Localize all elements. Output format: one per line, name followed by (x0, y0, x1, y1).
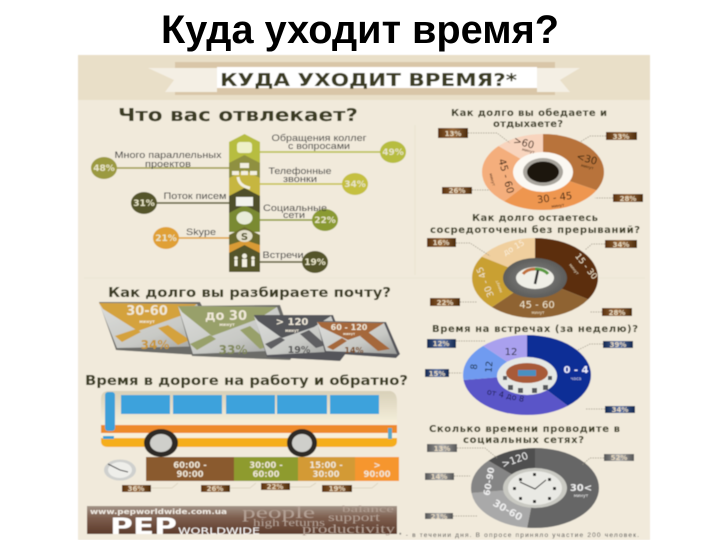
heading: commute: Время в дороге на работу и обратно? (85, 374, 408, 389)
donut chart: 45 - 60 (496, 158, 515, 195)
donut chart: >120 (500, 451, 530, 471)
panel: meetings (425, 324, 638, 414)
donut chart: от 4 до 8 (486, 387, 525, 404)
heading (451, 107, 607, 130)
column icons: S (241, 232, 248, 243)
footer: PEP Worldwide banner: support (328, 510, 381, 524)
percent tags: 16% (433, 239, 449, 247)
footer: PEP Worldwide banner: high returns (253, 517, 325, 529)
footnote: * - в течении дня. В опросе приняло участие 200 человек. (399, 532, 639, 539)
percent tags: 28% (620, 195, 636, 203)
envelope >120: минут (285, 328, 300, 333)
chart: email envelopes (99, 302, 400, 361)
envelope до 30: до 30 (205, 309, 247, 324)
chart: distractions column (91, 133, 406, 273)
chart: commute time bars: 30:00 - (249, 461, 283, 471)
envelope до 30: минут (219, 323, 235, 328)
bus windows (121, 395, 379, 414)
chart: commute time bars: > (373, 461, 381, 471)
donut chart: 30 - 45 (536, 191, 573, 206)
percent tags: 33% (613, 133, 629, 141)
percent badges: 21% (155, 234, 177, 244)
donut chart: минут (574, 494, 589, 499)
footer: PEP Worldwide banner: PEP (110, 515, 177, 540)
panel: focus (427, 213, 640, 317)
title: Куда уходит время? (161, 8, 559, 52)
percent badges: 31% (133, 199, 155, 209)
column icons (232, 142, 257, 267)
envelope до 30 (178, 305, 296, 360)
commute percent tags: 19% (329, 485, 345, 493)
chart: commute time bars: 90:00 (176, 470, 204, 480)
donut chart: минут (494, 279, 503, 293)
commute percent tags (122, 483, 378, 493)
commute percent tags: 36% (128, 485, 144, 493)
chart: commute time bars: 60:00 (252, 470, 280, 480)
percent tags (427, 238, 637, 317)
commute percent tags: 26% (207, 485, 223, 493)
donut chart: 12 (505, 347, 517, 358)
item labels: Обращения коллег (272, 133, 367, 144)
banner ribbon (148, 62, 580, 95)
percent tags (425, 444, 634, 521)
item labels: Поток писем (164, 191, 226, 202)
heading: отдыхаете? (493, 119, 563, 130)
panel: social media (425, 424, 634, 524)
heading: Сколько времени проводите в (429, 424, 620, 435)
donut chart: <30 (575, 152, 598, 168)
percent tags: 22% (437, 299, 453, 307)
donut chart: 15 - 30 (572, 252, 599, 282)
percent tags: 34% (612, 406, 628, 414)
envelope 30-60: минут (139, 320, 155, 325)
chart: commute time bars: 90:00 (363, 470, 391, 480)
percent badges: 48% (93, 164, 115, 174)
envelope 60-120: 14% (344, 346, 364, 355)
chart: commute time bars: 30:00 (312, 470, 340, 480)
item labels: Социальные (263, 203, 327, 214)
donut chart (470, 347, 589, 404)
item labels: Много параллельных (114, 150, 222, 161)
item labels: с вопросами (288, 141, 350, 152)
donut chart: минут (532, 310, 545, 315)
donut chart: >60 (512, 136, 535, 152)
percent tags: 34% (613, 241, 629, 249)
donut chart: 12 (485, 361, 495, 373)
percent tags: 15% (429, 370, 445, 378)
percent tags: 21% (431, 513, 447, 521)
percent tags: 39% (610, 341, 626, 349)
donut chart: 8 (470, 363, 480, 370)
heading: социальных сетях? (463, 435, 584, 446)
heading: Как долго вы обедаете и (451, 107, 607, 119)
connector lines (104, 152, 393, 262)
percent tags: 28% (609, 309, 625, 317)
envelope >120: 19% (288, 345, 311, 356)
footer: PEP Worldwide banner: people (242, 503, 315, 522)
footer: PEP Worldwide banner: WORLDWIDE (178, 527, 260, 537)
donut chart: минут (488, 173, 497, 187)
donut chart: 60-90 (483, 467, 497, 497)
donut chart: 30 - 45 (476, 265, 497, 298)
item labels: проектов (145, 159, 191, 170)
percent tags: 13% (434, 445, 450, 453)
illustration: bus (101, 391, 397, 457)
donut chart: минут (580, 162, 595, 171)
heading: сосредоточены без прерываний? (430, 224, 640, 236)
percent tags: 13% (445, 130, 461, 138)
footer: PEP Worldwide banner: www.pepworldwide.com.ua (90, 508, 227, 516)
percent badges: 22% (314, 216, 336, 226)
infographic poster (78, 55, 650, 540)
envelope до 30: 33% (219, 343, 247, 357)
footer: PEP Worldwide banner (87, 503, 397, 540)
column segments (229, 134, 260, 272)
heading (429, 424, 620, 446)
item labels (114, 133, 367, 261)
panel: lunch (438, 107, 643, 209)
donut chart (483, 451, 592, 524)
envelope 60-120 (317, 321, 400, 358)
envelope 60-120: 60 - 120 (331, 323, 368, 332)
percent badges (91, 141, 406, 273)
bus wheels (144, 429, 317, 457)
commute percent tags: 22% (267, 483, 283, 491)
footer: PEP Worldwide banner: productivity (302, 521, 396, 536)
heading (430, 213, 640, 236)
item labels: звонки (283, 174, 317, 185)
chart: commute time bars (122, 457, 399, 493)
percent tags: 26% (449, 187, 465, 195)
donut chart: минут (521, 146, 536, 155)
banner heading: КУДА УХОДИТ ВРЕМЯ?* (220, 70, 518, 91)
envelope 60-120: минут (343, 332, 356, 336)
heading: Время на встречах (за неделю)? (432, 324, 638, 335)
envelope 30-60: 34% (141, 338, 169, 352)
donut chart (488, 136, 598, 209)
heading: distractions: Что вас отвлекает? (118, 105, 358, 126)
envelope >120: > 120 (276, 317, 308, 328)
percent tags (425, 339, 635, 414)
envelope 30-60 (99, 302, 222, 356)
donut chart: часа (571, 377, 582, 382)
percent badges: 19% (304, 258, 326, 268)
percent tags: 52% (611, 454, 627, 462)
donut chart: минут (568, 262, 581, 276)
donut chart (476, 238, 599, 315)
heading: Как долго остаетесь (472, 213, 598, 224)
item labels: сети (283, 210, 305, 221)
percent badges: 34% (344, 180, 366, 190)
donut chart: до 15 (501, 238, 526, 258)
donut chart: 30-60 (491, 498, 524, 524)
donut chart: 45 - 60 (519, 300, 555, 311)
donut chart: минут (551, 202, 565, 209)
envelope 30-60: 30-60 (126, 304, 168, 319)
percent tags (438, 128, 643, 203)
chart: commute time bars: 60:00 - (173, 461, 207, 471)
percent tags: 14% (431, 473, 447, 481)
item labels: Встречи (262, 250, 304, 261)
footer: PEP Worldwide banner: balance (342, 504, 394, 514)
item labels: Skype (186, 227, 216, 238)
icon: stopwatch (104, 460, 136, 480)
donut chart: 0 - 4 (563, 365, 589, 376)
chart: commute time bars: 15:00 - (309, 461, 343, 471)
item labels: Телефонные (268, 166, 332, 177)
donut chart: 30< (570, 483, 592, 494)
envelope >120 (254, 315, 347, 361)
heading: email: Как долго вы разбираете почту? (108, 286, 391, 301)
percent tags: 12% (433, 340, 449, 348)
percent badges: 49% (382, 148, 404, 158)
